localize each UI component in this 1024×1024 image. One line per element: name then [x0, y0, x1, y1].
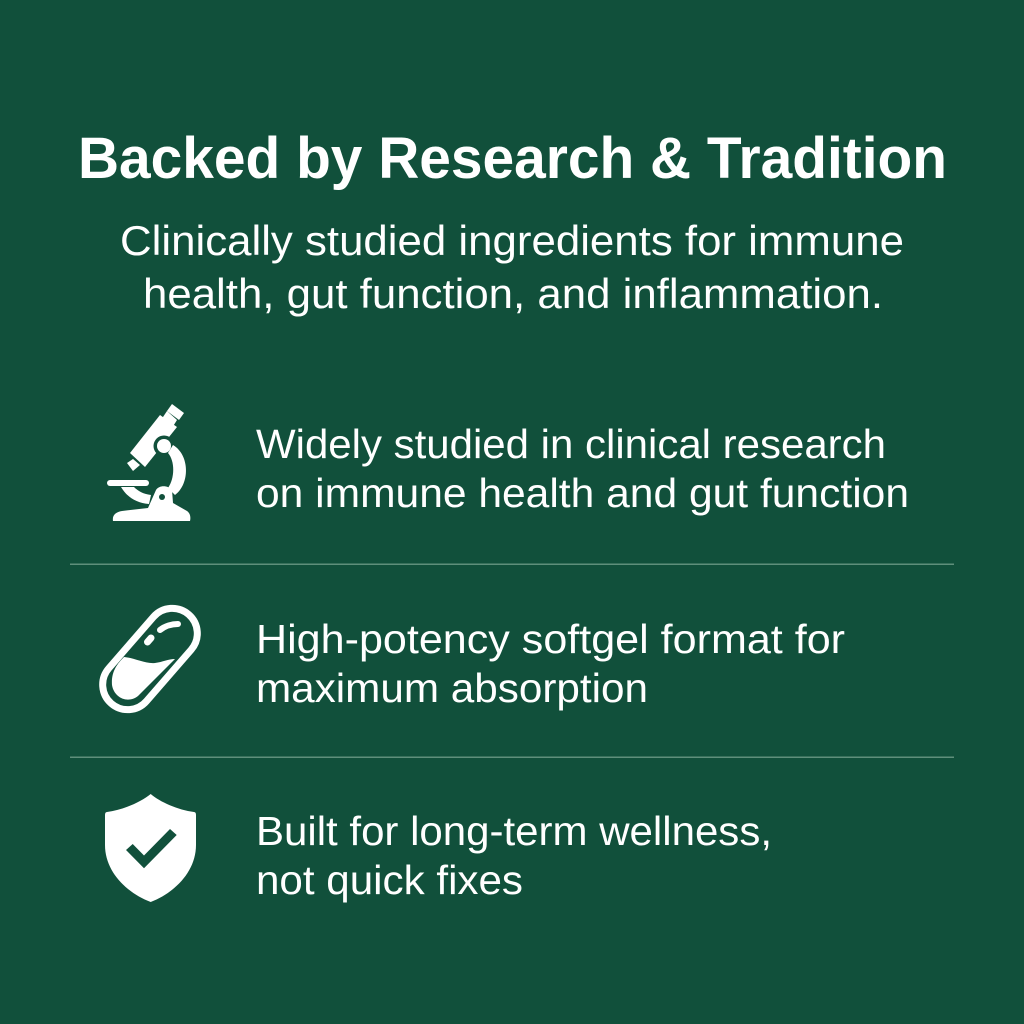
icon: shield with check [105, 794, 196, 902]
title: Backed by Research & Tradition [78, 126, 947, 191]
row 3: long-term wellness [105, 794, 772, 903]
text: clinical research [256, 421, 909, 516]
text: softgel: High-potency softgel format for [256, 616, 845, 662]
text: long-term wellness: Built for long-term wellness, [256, 808, 772, 854]
subtitle [120, 217, 904, 317]
row 1: clinical research [107, 404, 909, 521]
icon: microscope [107, 404, 190, 521]
text: long-term wellness: not quick fixes [256, 857, 523, 903]
row 2: softgel [92, 598, 845, 720]
text: softgel [256, 616, 845, 711]
text: clinical research: on immune health and gut function [256, 470, 909, 516]
text: softgel: maximum absorption [256, 665, 648, 711]
icon: softgel capsule [92, 598, 208, 720]
subtitle: Clinically studied ingredients for immune [120, 217, 904, 264]
subtitle: health, gut function, and inflammation. [143, 270, 883, 317]
text: long-term wellness [256, 808, 772, 903]
text: clinical research: Widely studied in clinical research [256, 421, 886, 467]
